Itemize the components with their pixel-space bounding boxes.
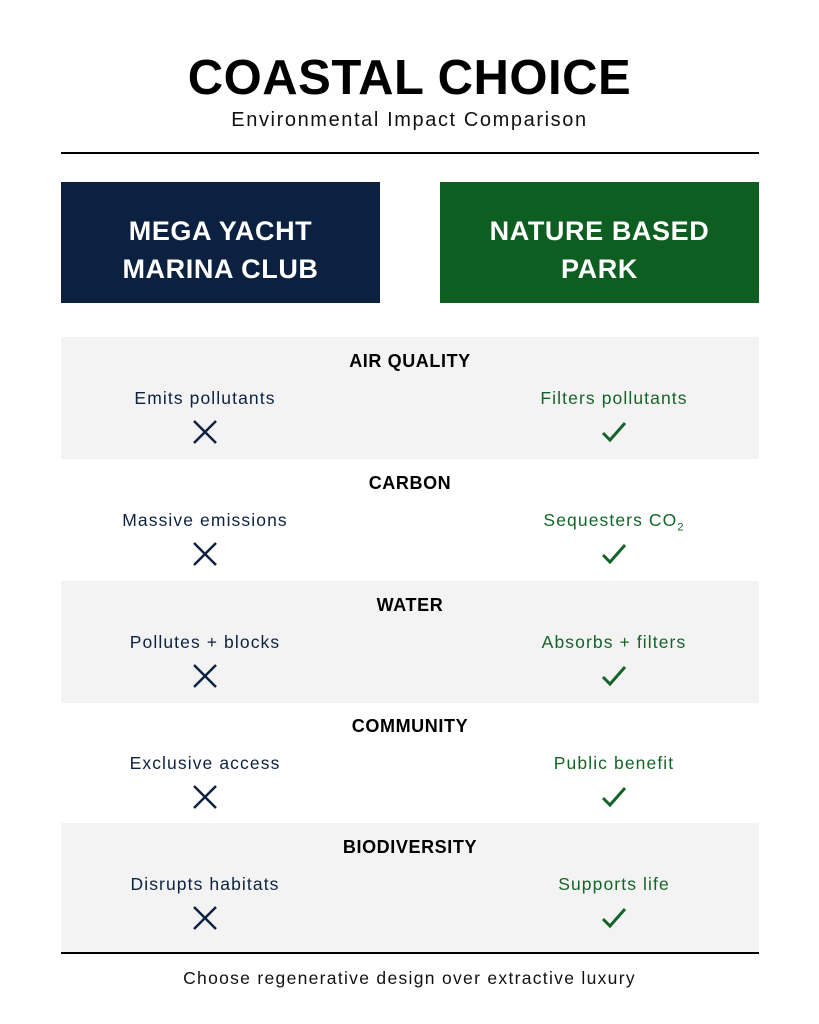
icon: check	[602, 908, 626, 928]
row: carbon: CARBON	[369, 473, 451, 493]
header: mega yacht marina club	[61, 182, 380, 303]
header: nature based park	[440, 182, 759, 303]
row: community: COMMUNITY	[352, 716, 468, 736]
row: carbon	[122, 473, 685, 566]
row: carbon: Massive emissions	[122, 510, 288, 530]
row: community	[130, 716, 674, 809]
row: water: Absorbs + filters	[542, 632, 686, 652]
icon: cross	[193, 664, 217, 688]
icon: check	[602, 544, 626, 564]
row: community: Public benefit	[554, 753, 674, 773]
row: community: Exclusive access	[130, 753, 280, 773]
row: air quality	[61, 337, 759, 459]
header: mega yacht marina club: MARINA CLUB	[122, 254, 319, 284]
row: water: Pollutes + blocks	[130, 632, 280, 652]
subtitle: Environmental Impact Comparison	[231, 109, 588, 131]
icon: check	[602, 787, 626, 808]
icon: cross	[193, 785, 217, 809]
row: biodiversity: Disrupts habitats	[130, 874, 280, 894]
row: biodiversity: BIODIVERSITY	[343, 837, 477, 857]
row: air quality: Filters pollutants	[540, 388, 688, 408]
icon: cross	[193, 542, 217, 566]
footer text: Choose regenerative design over extractive luxury	[183, 968, 636, 988]
icon: cross	[193, 906, 217, 930]
row: air quality: AIR QUALITY	[349, 351, 471, 371]
row: water	[61, 581, 759, 703]
header: nature based park: NATURE BASED	[490, 216, 709, 246]
icon: check	[602, 422, 626, 442]
icon: cross	[193, 420, 217, 444]
row: air quality: Emits pollutants	[134, 388, 276, 408]
header: nature based park: PARK	[561, 254, 638, 284]
icon: check	[602, 666, 626, 686]
row: water: WATER	[377, 595, 443, 615]
title: COASTAL CHOICE	[188, 51, 631, 105]
row: carbon: Sequesters CO2	[543, 510, 685, 534]
row: biodiversity	[61, 823, 759, 952]
header: mega yacht marina club: MEGA YACHT	[129, 216, 312, 246]
row: biodiversity: Supports life	[558, 874, 670, 894]
